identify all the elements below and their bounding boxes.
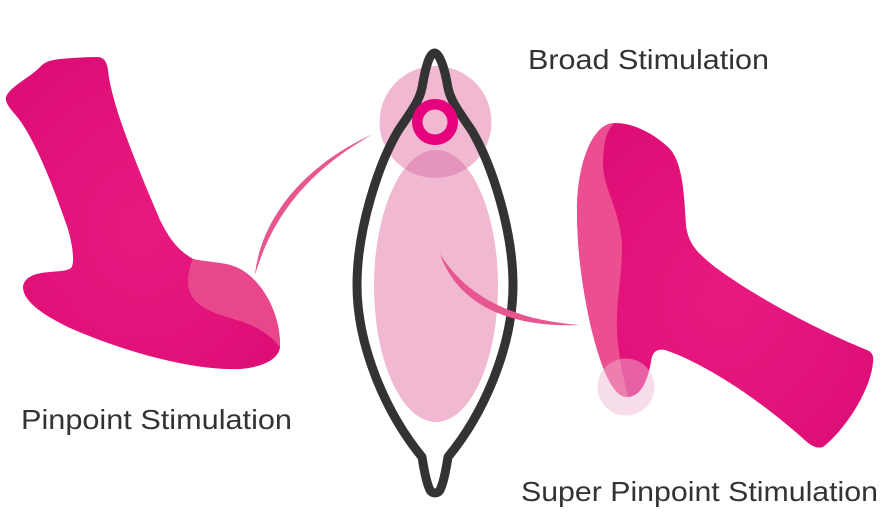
right product: super pinpoint device [577, 123, 873, 448]
anatomy outline [357, 53, 513, 493]
broad stimulation circle [380, 66, 492, 178]
left product: pinpoint device [6, 57, 280, 369]
label: pinpoint stimulation: Pinpoint Stimulation [21, 404, 292, 435]
label: broad stimulation: Broad Stimulation [528, 44, 769, 75]
pinpoint ring [417, 104, 453, 140]
curved connector: right [440, 254, 580, 325]
label: super pinpoint stimulation: Super Pinpoint Stimulation [521, 476, 878, 507]
curved connector: left [255, 134, 373, 275]
internal oval zone [374, 150, 498, 422]
super pinpoint halo [598, 358, 654, 416]
lighter tip on left product [188, 259, 280, 347]
lighter edge on right product [577, 123, 628, 397]
overlap of circle and oval [404, 150, 467, 178]
